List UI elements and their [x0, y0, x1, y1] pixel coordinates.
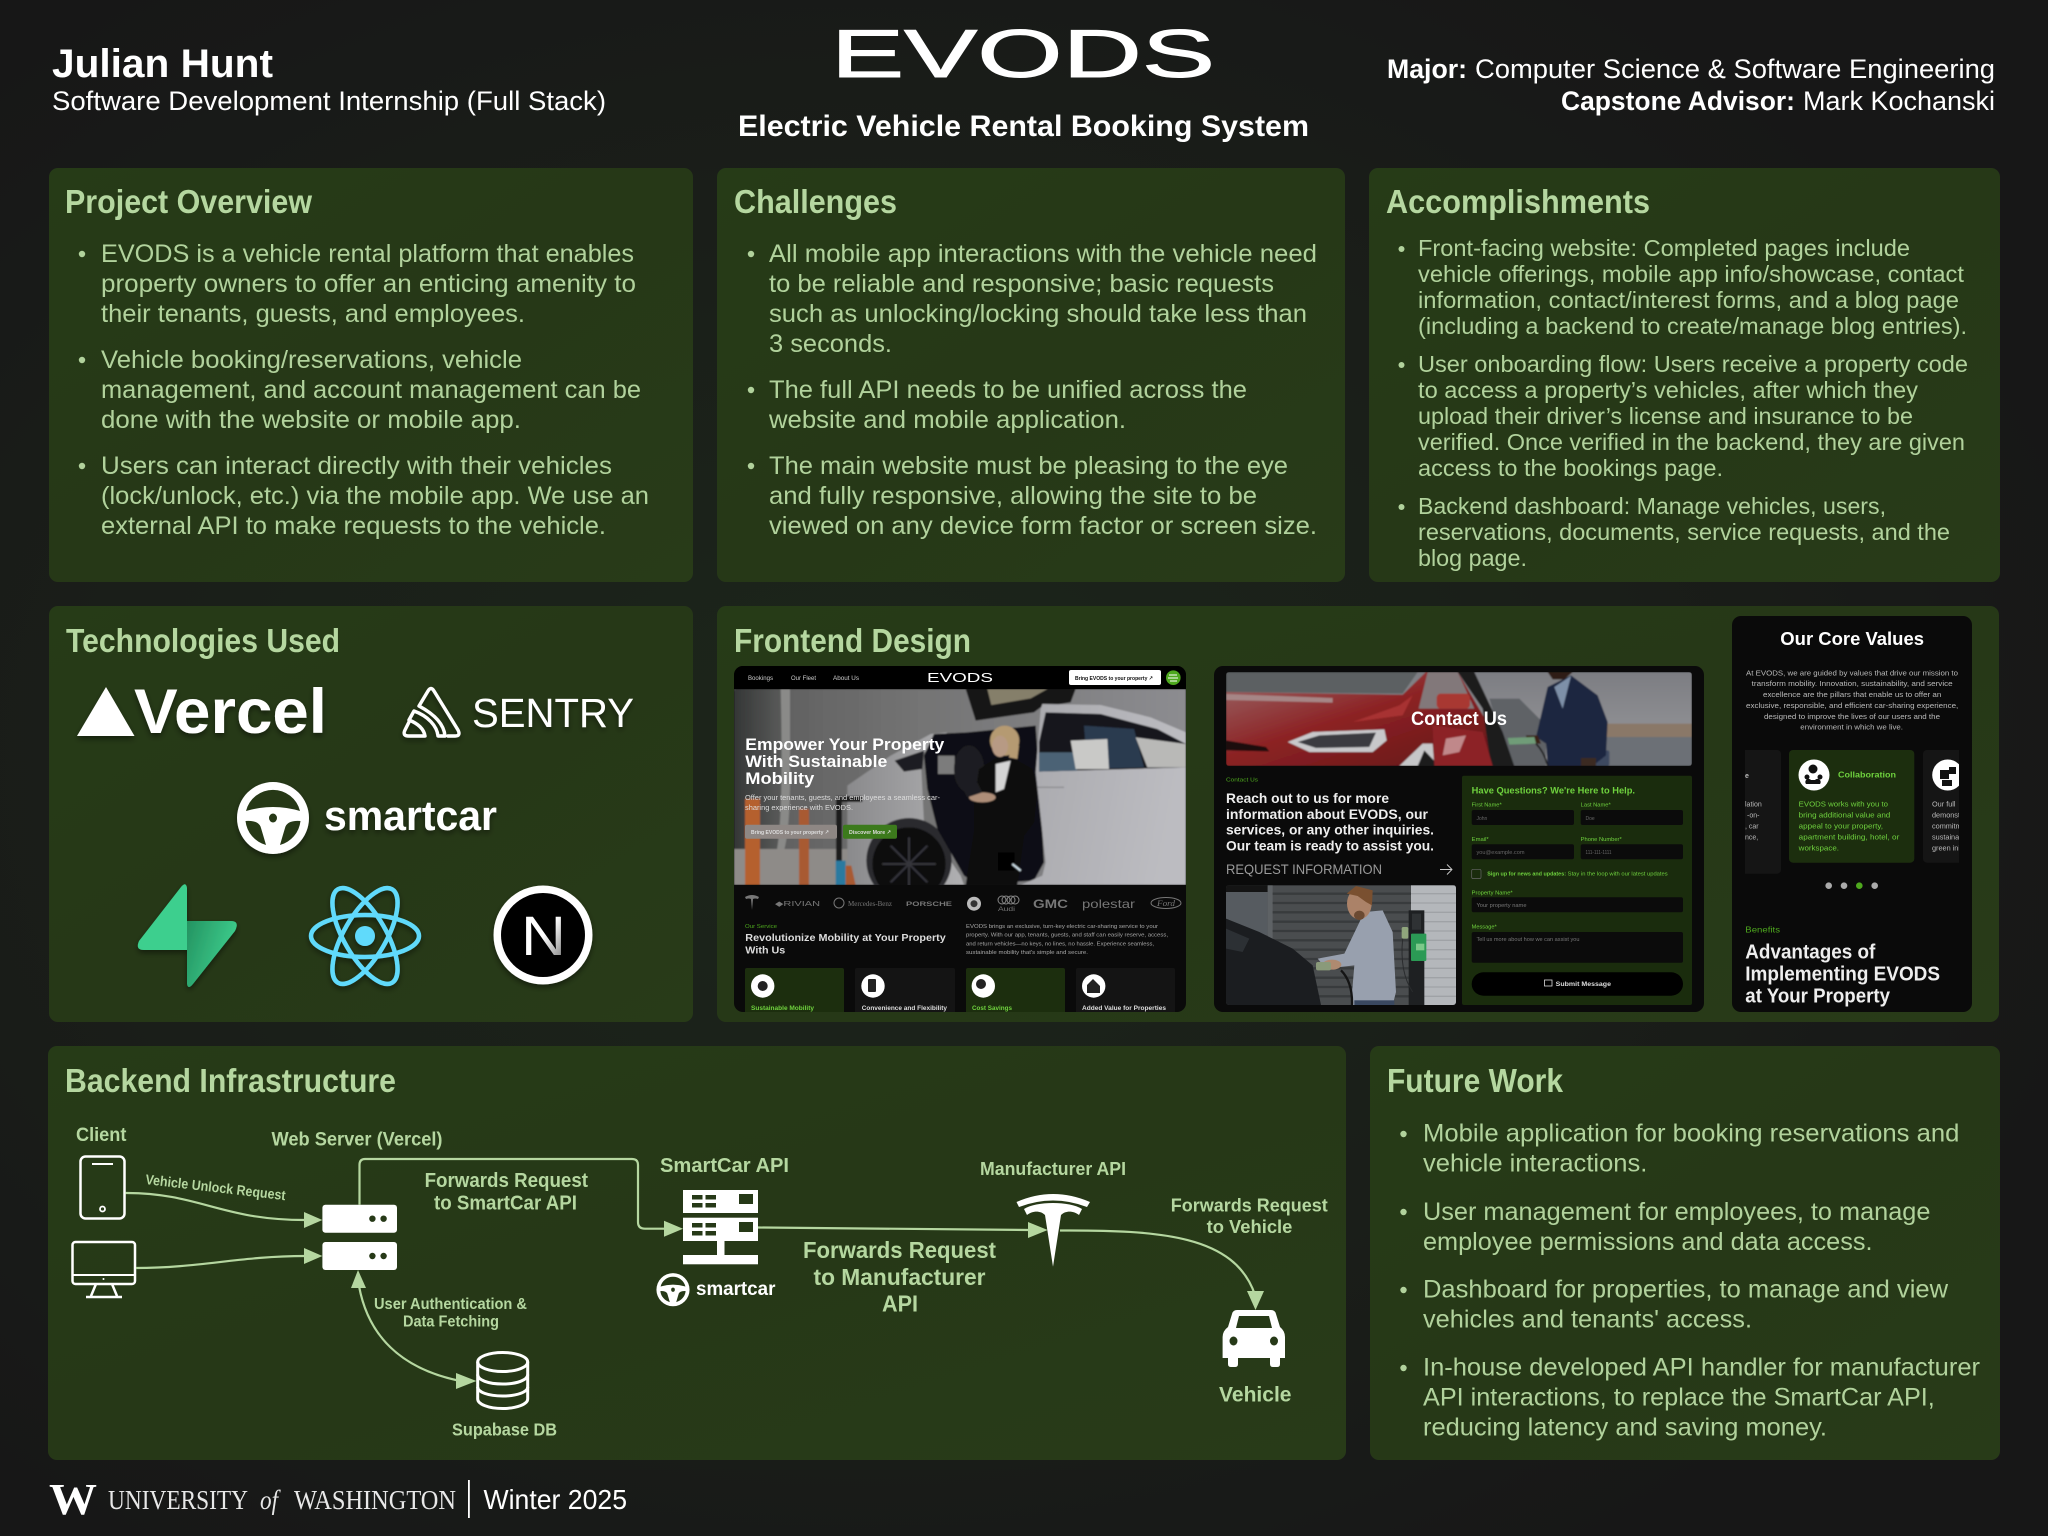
form fields — [1472, 803, 1683, 963]
contact intro: Contact Us — [1226, 778, 1258, 784]
bullet: backend dashboard — [1398, 493, 1950, 571]
core values paragraph: excellence are the pillars that enable us to offer an — [1763, 690, 1941, 699]
feature cards: Sustainable Mobility — [751, 1005, 814, 1012]
form fields: Property Name* — [1472, 890, 1513, 896]
benefits heading — [1745, 926, 1940, 1008]
card: next (clipped): Our full — [1932, 800, 1956, 809]
bullet: platform: EVODS is a vehicle rental platform that enables — [101, 240, 634, 268]
logo: smartcar small: smartcar — [696, 1279, 776, 1300]
bullet: backend dashboard: reservations, documents, service requests, and the — [1418, 519, 1950, 545]
bullet: unified API: website and mobile application. — [768, 406, 1126, 434]
panel: accomplishments — [1369, 168, 2000, 582]
service description — [966, 924, 1168, 956]
screenshot: core values page — [1732, 616, 1972, 1012]
label: forwards request to SmartCar API — [425, 1170, 588, 1215]
nav bar: Our Fleet — [791, 675, 816, 682]
card: previous (clipped): e — [1745, 773, 1749, 780]
bullet: front-facing website — [1398, 235, 1967, 339]
bullet: responsive site: and fully responsive, allowing the site to be — [769, 482, 1257, 510]
term: Winter 2025 — [484, 1484, 627, 1515]
card: previous (clipped): , car — [1745, 824, 1759, 831]
core values paragraph: environment in which we live. — [1800, 723, 1903, 732]
bullet: dashboard: Dashboard for properties, to manage and view — [1423, 1276, 1949, 1304]
footer: University of Washington and term — [49, 1475, 627, 1524]
bullet: in-house API: API interactions, to replace the SmartCar API, — [1423, 1384, 1935, 1412]
form fields: Stay in the loop with our latest updates — [1568, 871, 1668, 877]
bullet: responsive site: The main website must be pleasing to the eye — [769, 452, 1288, 480]
bullet: platform — [79, 240, 636, 328]
arrow: phone to server — [126, 1193, 322, 1228]
core values paragraph: At EVODS, we are guided by values that drive our mission to — [1746, 668, 1958, 677]
bullet: user onboarding: upload their driver’s license and insurance to be — [1418, 403, 1913, 429]
label: forwards request to vehicle: to Vehicle — [1207, 1217, 1292, 1237]
header: EVODS logo and project title — [738, 16, 1309, 143]
bullet: platform: property owners to offer an enticing amenity to — [101, 270, 636, 298]
form fields: Sign up for news and updates: — [1487, 871, 1566, 877]
university wordmark: WASHINGTON — [294, 1485, 456, 1515]
panel: future work — [1370, 1046, 2000, 1460]
university wordmark: of — [260, 1485, 281, 1515]
card: previous (clipped): -on- — [1747, 813, 1760, 820]
hero headline: With Sustainable — [745, 753, 887, 771]
service heading: Our Service — [745, 924, 777, 930]
card: collaboration: workspace. — [1798, 844, 1839, 853]
hero photo: woman exiting car — [734, 689, 1186, 903]
label: web server: Web Server (Vercel) — [272, 1130, 442, 1151]
logo: React — [311, 879, 419, 993]
major label: Major: — [1387, 54, 1467, 84]
project title: Electric Vehicle Rental Booking System — [738, 110, 1309, 143]
bullet: user onboarding: access to the bookings page. — [1418, 455, 1723, 481]
bullet: user onboarding: User onboarding flow: Users receive a property code — [1418, 351, 1968, 377]
service heading: With Us — [745, 944, 785, 956]
card: collaboration: bring additional value and — [1799, 811, 1890, 820]
bullet: responsive site: viewed on any device form factor or screen size. — [769, 512, 1317, 540]
arrow: SmartCar to manufacturer — [758, 1222, 1048, 1238]
brand strip: ◆RIVIAN — [775, 901, 820, 908]
logo: Sentry — [404, 688, 634, 736]
logo: smartcar — [237, 782, 497, 854]
label: manufacturer API: Manufacturer API — [980, 1159, 1126, 1179]
nav bar: Bookings — [748, 675, 774, 682]
icon: phone — [80, 1156, 124, 1218]
university wordmark — [108, 1485, 456, 1515]
card: collaboration: EVODS works with you to — [1799, 800, 1888, 809]
core values paragraph — [1746, 668, 1958, 732]
icon: desktop — [72, 1242, 135, 1297]
card: next (clipped): sustainable — [1932, 833, 1969, 842]
bullet: booking: Vehicle booking/reservations, vehicle — [101, 346, 522, 374]
label: forwards request to manufacturer API: to Manufacturer — [814, 1264, 986, 1290]
arrow: server to database — [351, 1270, 476, 1389]
nav bar: EVODS — [927, 671, 993, 685]
bullet: backend dashboard: blog page. — [1418, 545, 1527, 571]
bullet: front-facing website: information, contact/interest forms, and a blog page — [1418, 287, 1959, 313]
bullet: in-house API: In-house developed API handler for manufacturer — [1423, 1354, 1980, 1382]
bullet: backend dashboard: Backend dashboard: Manage vehicles, users, — [1418, 493, 1886, 519]
bullet: user management: User management for employees, to manage — [1423, 1198, 1930, 1226]
bullet: interaction: (lock/unlock, etc.) via the mobile app. We use an — [101, 482, 649, 510]
arrow: desktop to server — [136, 1248, 322, 1268]
bullet: reliability: All mobile app interactions with the vehicle need — [769, 240, 1317, 268]
carousel cards — [1745, 750, 1959, 874]
bullet: in-house API — [1400, 1354, 1980, 1442]
bullet: reliability: such as unlocking/locking should take less than — [769, 300, 1307, 328]
hero buttons: Discover More ↗ — [849, 830, 891, 836]
card: previous (clipped): lation — [1745, 802, 1762, 809]
contact intro: information about EVODS, our — [1226, 806, 1429, 822]
hero headline: Mobility — [745, 770, 815, 788]
submit button: Submit Message — [1556, 981, 1611, 988]
university wordmark: UNIVERSITY — [108, 1485, 248, 1515]
arrow: server to SmartCar API — [360, 1159, 683, 1237]
screenshot: landing page — [734, 666, 1186, 1018]
bullet: interaction: external API to make requests to the vehicle. — [101, 512, 606, 540]
bullet: booking: done with the website or mobile app. — [101, 406, 521, 434]
contact form panel: Have Questions? We're Here to Help. — [1472, 786, 1635, 796]
bullet: mobile application: Mobile application for booking reservations and — [1423, 1120, 1959, 1148]
hero headline — [745, 736, 945, 812]
form fields: Phone Number* — [1581, 837, 1622, 843]
advisor label: Capstone Advisor: — [1561, 86, 1795, 116]
icon: SmartCar API server — [683, 1190, 758, 1264]
logo: Next.js: N — [521, 904, 566, 967]
feature cards: Convenience and Flexibility — [862, 1005, 947, 1012]
card: next (clipped): commitment — [1932, 822, 1972, 831]
contact form panel — [1462, 776, 1692, 1005]
divider — [468, 1480, 470, 1518]
nav bar: About Us — [833, 675, 860, 682]
logo: smartcar small — [656, 1273, 776, 1306]
bullet: mobile application — [1400, 1120, 1959, 1178]
card: collaboration: apartment building, hotel, or — [1799, 833, 1900, 842]
hero buttons: Bring EVODS to your property ↗ — [751, 830, 829, 836]
photo: man charging car — [1226, 885, 1456, 1005]
form fields: 111-111-1111 — [1586, 850, 1612, 856]
nav bar — [734, 666, 1186, 689]
label: vehicle unlock request: Vehicle Unlock Request — [145, 1171, 287, 1203]
label: user authentication: User Authentication & — [374, 1296, 527, 1313]
form fields: Last Name* — [1581, 803, 1611, 809]
label: forwards request to manufacturer API: API — [882, 1291, 918, 1317]
bullet: booking — [79, 346, 641, 434]
bullet: interaction: Users can interact directly with their vehicles — [101, 452, 612, 480]
contact intro: services, or any other inquiries. — [1226, 822, 1434, 838]
service description: property. With our app, tenants, guests, and staff can easily reserve, access, — [966, 933, 1168, 939]
logo: EVODS wordmark: EVODS — [831, 16, 1215, 92]
label: SmartCar API: SmartCar API — [660, 1155, 789, 1177]
feature cards: Added Value for Properties — [1082, 1005, 1166, 1012]
hero headline: sharing experience with EVODS. — [745, 805, 853, 812]
brand strip: Audi — [998, 907, 1015, 913]
label: user authentication: Data Fetching — [403, 1314, 499, 1331]
brand strip: GMC — [1033, 897, 1068, 911]
bullet: reliability: to be reliable and responsive; basic requests — [769, 270, 1274, 298]
core values paragraph: exclusive, responsible, and efficient car-sharing experience, — [1746, 701, 1958, 710]
contact intro: Reach out to us for more — [1226, 790, 1389, 806]
bullet: dashboard: vehicles and tenants' access. — [1423, 1306, 1752, 1334]
label: forwards request to SmartCar API: Forwards Request — [425, 1170, 588, 1192]
logo: smartcar: smartcar — [324, 792, 497, 839]
label: forwards request to manufacturer API — [803, 1237, 996, 1317]
logo: Supabase — [138, 884, 237, 987]
bullet: user management — [1400, 1198, 1930, 1256]
brand strip: PORSCHE — [906, 902, 952, 908]
icon: web servers — [322, 1205, 397, 1270]
heading: project overview: Project Overview — [65, 183, 312, 220]
arrow: manufacturer to vehicle — [1060, 1230, 1264, 1310]
contact intro: Our team is ready to assist you. — [1226, 837, 1434, 853]
heading: backend infrastructure: Backend Infrastructure — [65, 1062, 396, 1099]
heading: technologies used: Technologies Used — [66, 622, 340, 659]
form fields: First Name* — [1472, 803, 1502, 809]
brand strip — [745, 895, 1182, 911]
panel: challenges — [717, 168, 1345, 582]
panel: technologies used — [49, 606, 693, 1022]
card: previous (clipped): nce, — [1745, 835, 1758, 842]
bullet: front-facing website: vehicle offerings, mobile app info/showcase, contact — [1418, 261, 1965, 287]
panel: backend infrastructure — [48, 1046, 1346, 1460]
service heading — [745, 924, 946, 956]
logo: Next.js — [494, 886, 592, 984]
core values heading: Our Core Values — [1780, 629, 1924, 649]
bullet: user onboarding: to access a property’s vehicles, after which they — [1418, 377, 1919, 403]
form fields: Doe — [1586, 816, 1595, 822]
logo: Sentry: SENTRY — [472, 690, 634, 736]
benefits heading: Implementing EVODS — [1745, 964, 1940, 986]
bullet: mobile application: vehicle interactions. — [1423, 1150, 1647, 1178]
brand strip: Ford — [1156, 899, 1176, 908]
hero headline: Empower Your Property — [745, 736, 945, 754]
card: collaboration — [1789, 750, 1914, 863]
panel: frontend design — [717, 606, 2003, 1022]
bullet: interaction — [79, 452, 649, 540]
brand strip: Mercedes-Benz — [848, 899, 893, 908]
label: client: Client — [76, 1125, 127, 1146]
card: previous (clipped) — [1745, 750, 1781, 874]
icon: vehicle — [1223, 1310, 1285, 1367]
card: next (clipped): demonstrates — [1932, 811, 1977, 820]
heading: accomplishments: Accomplishments — [1386, 183, 1650, 220]
icon: Tesla logo — [1016, 1194, 1090, 1267]
heading: future work: Future Work — [1387, 1062, 1564, 1099]
major value: Computer Science & Software Engineering — [1475, 54, 1995, 84]
form fields: Tell us more about how we can assist you — [1476, 937, 1580, 943]
internship role: Software Development Internship (Full Stack) — [52, 86, 606, 116]
label: forwards request to vehicle: Forwards Request — [1171, 1196, 1328, 1216]
nav bar: Bring EVODS to your property ↗ — [1075, 676, 1153, 682]
form fields: Your property name — [1476, 903, 1527, 909]
service description: and return vehicles—no keys, no lines, no hassle. Experience seamless, — [966, 941, 1154, 947]
heading: challenges: Challenges — [734, 183, 897, 220]
bullet: reliability — [748, 240, 1317, 358]
bullet: user onboarding — [1398, 351, 1968, 481]
label: forwards request to SmartCar API: to SmartCar API — [434, 1193, 577, 1215]
benefits heading: Advantages of — [1745, 942, 1876, 964]
core values paragraph: transform mobility. Innovation, sustainability, and service — [1752, 679, 1953, 688]
logo: Vercel: Vercel — [134, 677, 327, 747]
benefits heading: Benefits — [1745, 926, 1780, 935]
label: user authentication — [374, 1296, 527, 1331]
form fields: you@example.com — [1476, 850, 1524, 856]
label: vehicle: Vehicle — [1219, 1384, 1292, 1407]
screenshot: contact page — [1214, 666, 1704, 1012]
student name: Julian Hunt — [52, 42, 273, 86]
panel: project overview — [49, 168, 693, 582]
service heading: Revolutionize Mobility at Your Property — [745, 932, 946, 944]
bullet: dashboard — [1400, 1276, 1949, 1334]
card: next (clipped) — [1923, 750, 1959, 862]
hero buttons — [745, 825, 897, 839]
bullet: unified API: The full API needs to be unified across the — [769, 376, 1247, 404]
service description: EVODS brings an exclusive, turn-key electric car-sharing service to your — [966, 924, 1158, 930]
logo: UW W mark: W — [49, 1475, 97, 1524]
label: forwards request to vehicle — [1171, 1196, 1328, 1237]
bullet: reliability: 3 seconds. — [769, 330, 892, 358]
form fields: Email* — [1472, 837, 1489, 843]
contact banner photo — [1226, 672, 1692, 766]
bullet: user management: employee permissions and data access. — [1423, 1228, 1872, 1256]
form fields: John — [1476, 816, 1488, 822]
header: major and advisor — [1387, 54, 1995, 116]
bullet: front-facing website: Front-facing website: Completed pages include — [1418, 235, 1910, 261]
icon: database — [478, 1352, 528, 1408]
bullet: front-facing website: (including a backend to create/manage blog entries). — [1418, 313, 1967, 339]
bullet: user onboarding: verified. Once verified in the backend, they are given — [1418, 429, 1965, 455]
contact banner title: Contact Us — [1411, 709, 1507, 730]
advisor value: Mark Kochanski — [1803, 86, 1995, 116]
form fields: Message* — [1472, 925, 1497, 931]
card: next (clipped): green initiatives — [1932, 844, 1983, 853]
core values paragraph: designed to improve the lives of our users and the — [1764, 712, 1940, 721]
card: collaboration: Collaboration — [1838, 769, 1896, 779]
card: collaboration: appeal to your property, — [1799, 822, 1883, 831]
submit button — [1472, 972, 1683, 996]
header: student name and role — [52, 42, 606, 116]
carousel dots — [1825, 882, 1878, 889]
feature cards: Cost Savings — [972, 1005, 1012, 1012]
hero headline: Offer your tenants, guests, and employees a seamless car- — [745, 795, 941, 802]
request information link: REQUEST INFORMATION — [1226, 861, 1382, 877]
feature cards — [745, 968, 1175, 1012]
bullet: platform: their tenants, guests, and employees. — [101, 300, 525, 328]
bullet: unified API — [748, 376, 1247, 434]
contact intro — [1226, 778, 1434, 853]
benefits heading: at Your Property — [1745, 986, 1891, 1008]
heading: frontend design: Frontend Design — [734, 622, 971, 659]
service description: sustainable mobility that's simple and secure. — [966, 950, 1088, 956]
brand strip: polestar — [1082, 897, 1135, 911]
bullet: booking: management, and account management can be — [101, 376, 641, 404]
bullet: in-house API: reducing latency and saving money. — [1423, 1414, 1827, 1442]
label: supabase DB: Supabase DB — [452, 1420, 557, 1440]
label: forwards request to manufacturer API: Forwards Request — [803, 1237, 996, 1263]
bullet: responsive site — [748, 452, 1317, 540]
